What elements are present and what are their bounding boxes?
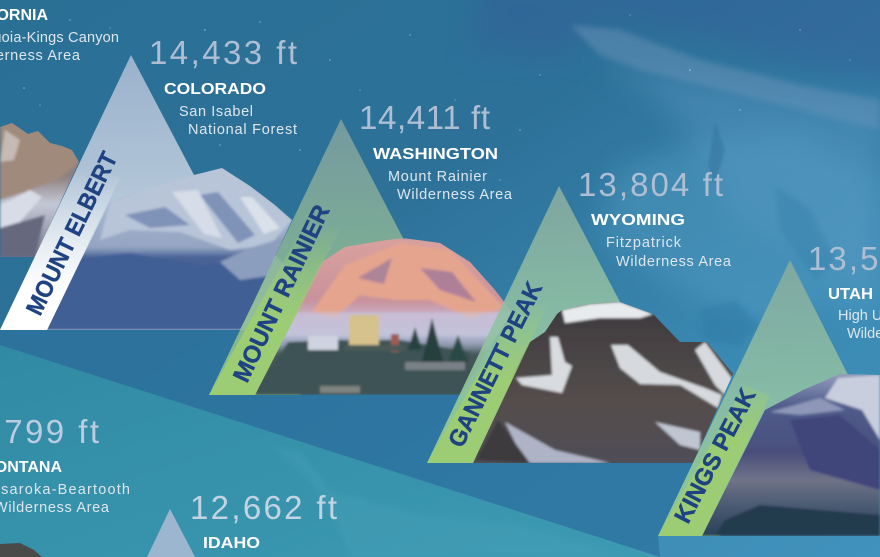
- triangle: [147, 509, 195, 557]
- mountain photo: [470, 300, 740, 465]
- wilderness line 2: National Forest: [188, 122, 297, 138]
- wilderness: Mount Rainier: [388, 169, 487, 185]
- green label strip: [427, 285, 550, 463]
- green label strip: [209, 205, 345, 395]
- triangle: [658, 260, 848, 536]
- peak: Mount Elbert: [0, 34, 297, 330]
- mountain photo: [700, 370, 880, 536]
- peak: Mount Rainier: [209, 99, 515, 395]
- teal lower band: [0, 345, 660, 557]
- state: IDAHO: [203, 535, 260, 552]
- wilderness: Fitzpatrick: [606, 235, 682, 251]
- elevation: 12,662 ft: [190, 489, 337, 526]
- mountain photo: [0, 543, 42, 557]
- label: MOUNT RAINIER: [228, 201, 336, 387]
- building: [349, 315, 379, 348]
- elevation: 14,433 ft: [149, 34, 297, 71]
- triangle: [427, 186, 620, 463]
- peak: Kings Peak: [658, 240, 880, 536]
- wilderness line 2: Wilderness Area: [616, 254, 732, 270]
- wilderness: San Isabel: [179, 104, 253, 120]
- peak: Idaho: [147, 489, 337, 557]
- elevation: 13,804 ft: [578, 166, 723, 203]
- state: WASHINGTON: [373, 146, 498, 163]
- state: COLORADO: [164, 81, 266, 98]
- green label strip: [658, 385, 770, 536]
- triangle: [209, 119, 403, 395]
- mountain photo: [250, 238, 515, 395]
- wilderness line 2: Wilderness Area: [397, 187, 513, 203]
- elevation: 14,411 ft: [359, 99, 490, 136]
- label: KINGS PEAK: [669, 383, 762, 528]
- peak: California photo and text: [0, 7, 119, 260]
- label: MOUNT ELBERT: [21, 148, 124, 320]
- label: GANNETT PEAK: [443, 277, 548, 452]
- mountain photo: [45, 165, 295, 330]
- state: UTAH: [828, 286, 873, 303]
- peak: Montana: [0, 413, 130, 557]
- state: WYOMING: [591, 212, 685, 229]
- white label strip: [0, 162, 120, 330]
- triangle: [0, 55, 290, 330]
- photo: Sierra peak: [0, 120, 82, 260]
- darker stepped band under the peaks: [0, 330, 693, 557]
- peak: Gannett Peak: [427, 166, 740, 465]
